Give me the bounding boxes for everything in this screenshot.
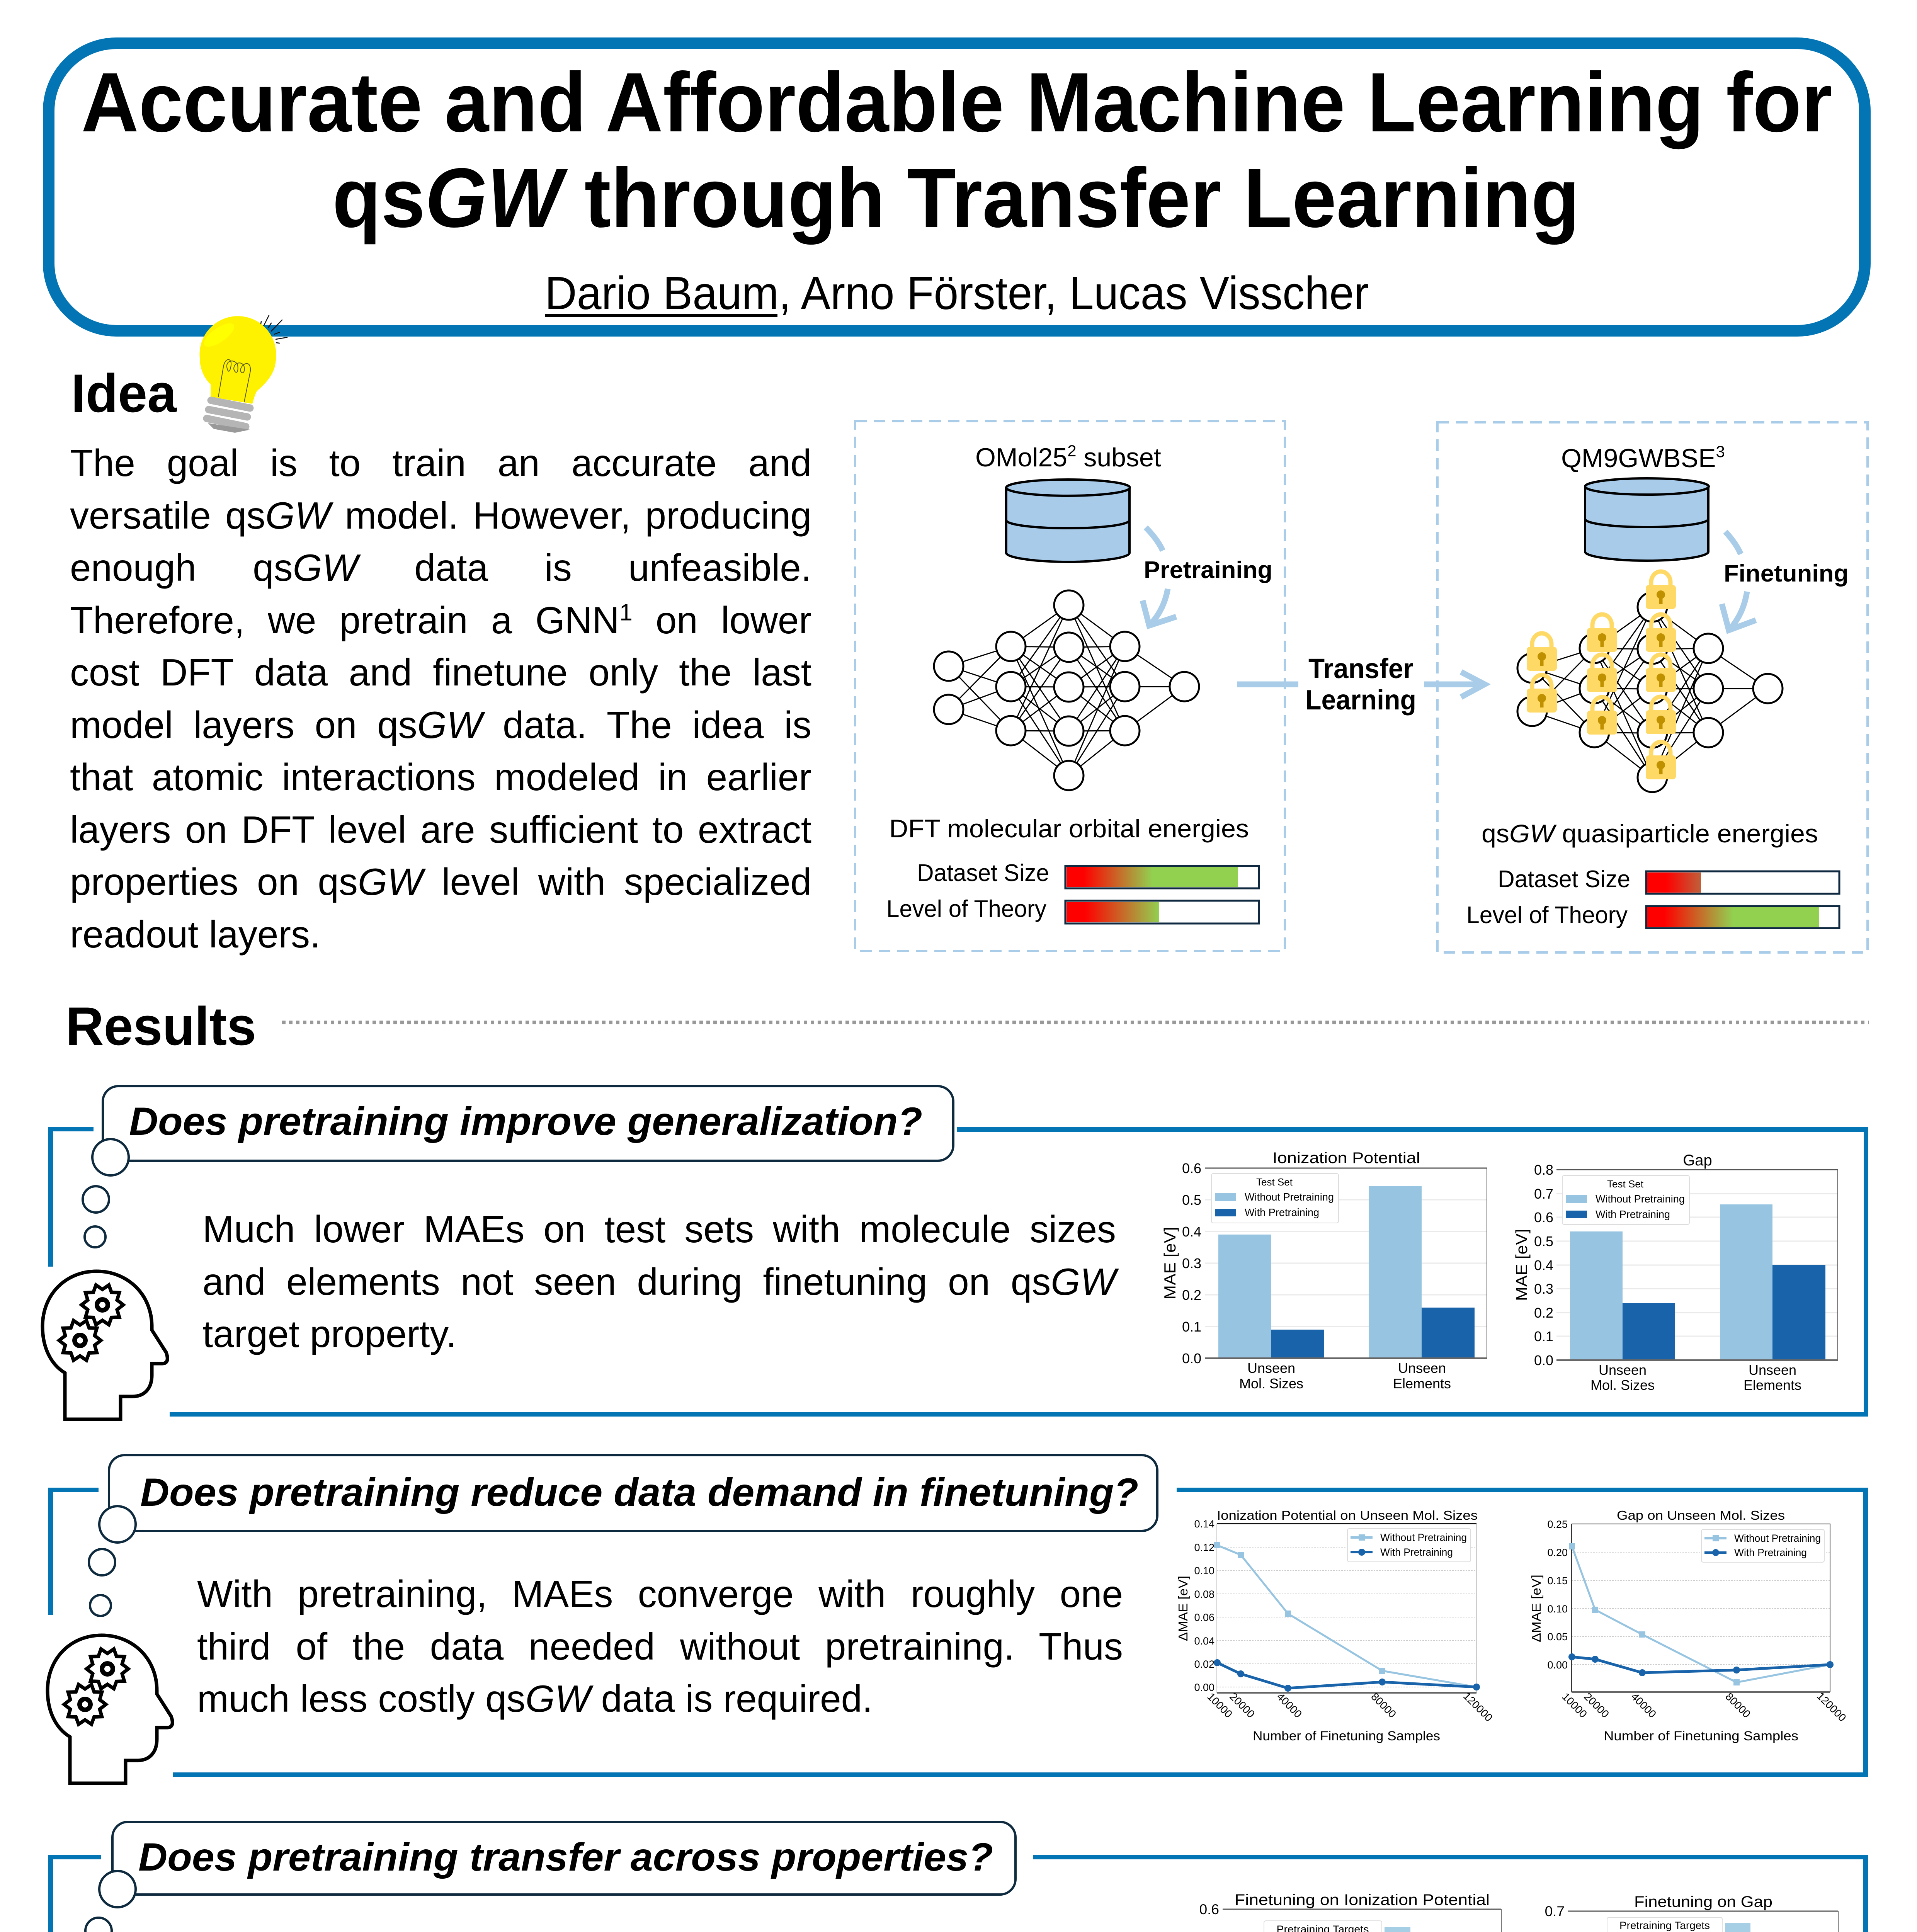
question heading 1: Does pretraining improve generalization? [129,1099,922,1143]
icon: head with gears [43,1271,167,1419]
chart: gap bars: 0.0 [1534,1352,1553,1368]
chart: gap bars: Elements [1744,1377,1801,1393]
chart: gap convergence: Gap on Unseen Mol. Sizes [1617,1508,1785,1522]
label: Pretraining: Pretraining [1144,557,1272,583]
chart: ionization potential bars: 0.1 [1182,1319,1201,1335]
caption: qsGW energies: qsGW quasiparticle energies [1482,819,1818,848]
chart: gap bars: 0.2 [1534,1305,1553,1321]
title panel frame [49,43,1865,331]
panel: question 3 [46,1822,1866,1932]
chart: gap bars [1512,1152,1838,1393]
chart: gap bars: 0.4 [1534,1257,1553,1273]
chart: gap bars: 0.8 [1534,1162,1553,1178]
legend: With Pretraining [1596,1208,1670,1220]
chart: gap convergence: ΔMAE [eV] [1529,1575,1543,1642]
thought bubbles [83,1139,129,1247]
authors: Dario Baum, Arno Förster, Lucas Visscher [545,267,1369,319]
chart: finetuning on ionization potential: Finetuning on Ionization Potential [1235,1891,1490,1908]
chart: finetuning on ionization potential [1179,1891,1501,1932]
chart: finetuning on ionization potential: 0.6 [1199,1901,1219,1917]
label: Finetuning: Finetuning [1724,560,1849,587]
dataset label: QM9GWBSE: QM9GWBSE [1561,444,1716,473]
arrow: transfer learning: Learning [1305,685,1416,716]
chart: ionization potential convergence: 0.00 [1194,1682,1214,1693]
chart: ionization potential convergence: ΔMAE [eV] [1176,1576,1190,1641]
text block: idea paragraph: Therefore, we pretrain a GNN1 on lower [70,599,811,641]
chart: gap convergence: 20000 [1582,1690,1611,1720]
text block: idea paragraph: that atomic interactions modeled in earlier [70,756,811,798]
heading: Idea: Idea [71,363,177,423]
chart: ionization potential bars: Ionization Potential [1272,1150,1420,1167]
title: Accurate and Affordable Machine Learning for [81,56,1832,150]
chart: finetuning on gap [1525,1893,1838,1932]
chart: ionization potential convergence: 120000 [1461,1690,1495,1724]
question heading 3 [112,1822,1015,1895]
dataset label: OMol25: OMol25 [975,443,1067,472]
chart: ionization potential convergence: Number of Finetuning Samples [1253,1729,1440,1743]
label: level of theory: Level of Theory [886,896,1046,922]
legend: Without Pretraining [1245,1191,1334,1203]
chart: gap convergence: 0.20 [1547,1547,1568,1558]
chart: ionization potential convergence: 0.06 [1194,1612,1214,1623]
panel: question 2 [48,1455,1866,1783]
caption: DFT energies: DFT molecular orbital energies [889,814,1249,843]
text block: idea paragraph: layers on DFT level are sufficient to extract [70,808,811,851]
legend: With Pretraining [1245,1206,1319,1218]
question heading 3: Does pretraining transfer across properties? [138,1835,993,1879]
legend: Without Pretraining [1734,1532,1821,1544]
chart: ionization potential convergence: 0.04 [1194,1635,1214,1647]
chart: ionization potential convergence: 10000 [1205,1690,1235,1720]
chart: gap convergence: 120000 [1815,1690,1849,1724]
chart: ionization potential bars: Unseen [1398,1360,1446,1376]
legend [1264,1921,1382,1932]
label: dataset size: Dataset Size [1498,866,1630,893]
chart: gap convergence: 0.15 [1547,1575,1568,1587]
chart: gap bars: 0.5 [1534,1233,1553,1249]
chart: gap bars: 0.6 [1534,1209,1553,1225]
chart: gap bars: Gap [1683,1152,1712,1169]
chart: ionization potential convergence: 0.10 [1194,1565,1214,1577]
dataset label: OMol25: subset [1076,443,1161,472]
heading: Results: Results [66,996,256,1056]
chart: ionization potential convergence: 40000 [1274,1690,1304,1720]
icon: database [1585,478,1709,561]
title [81,56,1832,245]
chart: ionization potential bars: 0.5 [1182,1192,1201,1208]
chart: ionization potential convergence: 0.14 [1194,1518,1214,1530]
chart: ionization potential bars: 0.2 [1182,1287,1201,1303]
chart: ionization potential bars: MAE [eV] [1161,1227,1179,1299]
chart: ionization potential bars: 0.3 [1182,1255,1201,1271]
text block: idea paragraph: readout layers. [70,913,320,955]
chart: gap convergence: 80000 [1723,1690,1753,1720]
chart: ionization potential convergence: 20000 [1227,1690,1257,1720]
text block: question 2 answer: With pretraining, MAEs converge with roughly one [197,1573,1123,1615]
legend [1607,1917,1722,1932]
neural network [934,590,1199,790]
bar: level of theory [1646,906,1839,928]
chart: gap convergence: 10000 [1560,1690,1589,1720]
chart: gap bars: 0.3 [1534,1281,1553,1297]
chart: ionization potential convergence: Ionization Potential on Unseen Mol. Sizes [1217,1508,1478,1522]
text block: idea paragraph: model layers on qsGW data. The idea is [70,703,811,746]
chart: finetuning on gap: Finetuning on Gap [1634,1893,1772,1910]
panel: finetuning diagram [1437,422,1868,952]
panel: pretraining diagram [855,421,1285,951]
icon: head with gears [48,1635,172,1783]
text block: question 1 answer: and elements not seen during finetuning on qsGW [202,1260,1116,1303]
chart: ionization potential bars: 0.0 [1182,1350,1201,1366]
question heading 2: Does pretraining reduce data demand in finetuning? [140,1470,1138,1514]
chart: ionization potential convergence: 80000 [1369,1690,1398,1720]
legend: Without Pretraining [1596,1193,1685,1205]
chart: ionization potential convergence: 0.02 [1194,1658,1214,1670]
legend [1701,1529,1824,1562]
chart: ionization potential bars: Mol. Sizes [1239,1376,1303,1391]
chart: finetuning on gap: 0.7 [1545,1903,1565,1919]
text block: question 1 answer: Much lower MAEs on test sets with molecule sizes [202,1208,1116,1250]
arrow: finetuning [1722,532,1756,630]
chart: gap convergence [1529,1508,1849,1743]
question heading 1 [103,1086,953,1161]
thought bubbles [85,1871,136,1932]
thought bubbles [89,1506,136,1616]
legend: With Pretraining [1380,1546,1453,1558]
arrow: transfer learning [1237,653,1485,716]
chart: gap convergence: 0.10 [1547,1603,1568,1615]
text block: question 2 answer [197,1568,1123,1725]
text block: idea paragraph [70,437,811,961]
chart: ionization potential convergence: 0.12 [1194,1542,1214,1553]
chart: ionization potential bars: Unseen [1247,1360,1295,1376]
chart: gap bars: Unseen [1749,1362,1796,1378]
label: dataset size: Dataset Size [917,860,1049,886]
legend: Test Set [1256,1176,1293,1188]
legend [1562,1175,1689,1225]
chart: gap convergence: Number of Finetuning Samples [1604,1729,1798,1743]
chart: ionization potential bars: 0.4 [1182,1224,1201,1240]
arrow: pretraining [1143,527,1176,626]
chart: gap bars: 0.7 [1534,1186,1553,1202]
text block: question 2 answer: much less costly qsGW data is required. [197,1677,873,1720]
chart: gap bars: MAE [eV] [1512,1229,1531,1301]
bar: level of theory [1065,901,1259,923]
text block: idea paragraph: cost DFT data and finetune only the last [70,651,811,694]
text block: question 1 answer [202,1203,1116,1360]
legend: With Pretraining [1734,1547,1807,1558]
question heading 2 [109,1455,1157,1531]
chart: ionization potential convergence: 0.08 [1194,1588,1214,1600]
chart: gap convergence: 40000 [1629,1690,1658,1720]
chart: gap bars: Unseen [1599,1362,1647,1378]
arrow: transfer learning: Transfer [1308,653,1414,684]
bar: dataset size [1646,871,1839,894]
text block: question 1 answer: target property. [202,1313,456,1355]
chart: gap convergence: 0.05 [1547,1631,1568,1643]
icon: light bulb [199,315,287,433]
text block: idea paragraph: The goal is to train an accurate and [70,442,811,484]
chart: ionization potential bars: Elements [1393,1376,1451,1391]
dataset label: QM9GWBSE: 3 [1716,442,1725,461]
neural network with locked layers [1517,571,1783,792]
chart: ionization potential bars [1161,1150,1487,1391]
text block: idea paragraph: properties on qsGW level with specialized [70,861,811,903]
text block: idea paragraph: enough qsGW data is unfeasible. [70,546,811,589]
bar: dataset size [1065,866,1259,888]
chart: gap convergence: 0.25 [1547,1519,1568,1530]
text block: question 2 answer: third of the data needed without pretraining. Thus [197,1625,1123,1668]
text block: idea paragraph: versatile qsGW model. However, producing [70,494,811,536]
chart: gap bars: 0.1 [1534,1328,1553,1344]
chart: gap convergence: 0.00 [1547,1659,1568,1671]
chart: ionization potential convergence [1176,1508,1495,1743]
chart: gap bars: Mol. Sizes [1590,1377,1655,1393]
chart: ionization potential bars: 0.6 [1182,1160,1201,1176]
legend: Test Set [1607,1178,1644,1190]
legend [1347,1529,1471,1562]
panel: question 1 [43,1086,1866,1419]
legend: Pretraining Targets [1619,1920,1710,1931]
label: level of theory: Level of Theory [1466,902,1628,929]
legend [1211,1173,1339,1223]
title: qsGW through Transfer Learning [332,151,1580,245]
legend: Without Pretraining [1380,1532,1467,1543]
dataset label: OMol25: 2 [1067,442,1076,460]
icon: database [1006,480,1130,562]
